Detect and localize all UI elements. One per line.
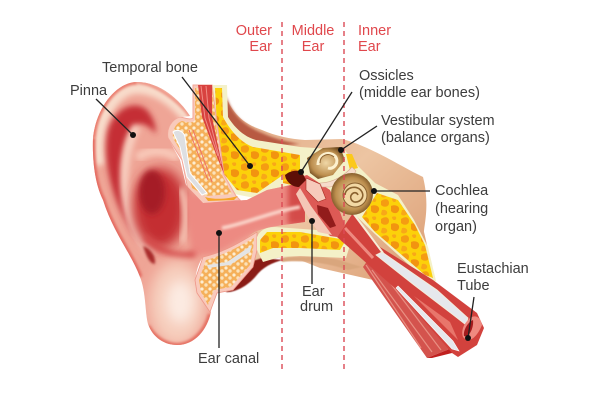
- muscle below the eustachian tube: [363, 257, 456, 358]
- outer ear (pinna, concha, lobe): [85, 75, 310, 350]
- temporal bone: [212, 85, 436, 284]
- callout: eustachian tube: [457, 261, 529, 341]
- canal: [184, 182, 305, 256]
- callout: vestibular system: [338, 113, 495, 153]
- vestibular system: [307, 147, 345, 179]
- eustachian tube: [337, 213, 484, 357]
- callout: pinna: Pinna: [70, 83, 108, 99]
- antihelix ridge: [125, 126, 152, 254]
- callout: cochlea: organ): [435, 219, 477, 235]
- ossicle bridge: [320, 167, 356, 187]
- callout: ear canal: Ear canal: [198, 351, 259, 367]
- callout: pinna: [70, 83, 136, 138]
- intertragic notch: [143, 246, 155, 264]
- tragus highlight: [181, 188, 185, 243]
- callout: ear drum: Ear: [302, 284, 325, 300]
- scapha dark groove: [106, 105, 156, 242]
- heading: middle ear: Ear: [302, 39, 324, 55]
- callout: ossicles: Ossicles: [359, 68, 414, 84]
- callout: cochlea: [371, 183, 489, 235]
- lobe: [149, 261, 205, 345]
- brown tissue behind the skull bone: [222, 92, 434, 292]
- heading: inner ear: Inner: [358, 23, 391, 39]
- cochlea: [331, 173, 373, 215]
- callout: ear drum: [300, 218, 333, 315]
- concha: [133, 168, 187, 248]
- callout: ossicles: (middle ear bones): [359, 85, 480, 101]
- callout: vestibular system: Vestibular system: [381, 113, 495, 129]
- callout: cochlea: (hearing: [435, 201, 488, 217]
- callout: ear canal: [198, 230, 259, 367]
- callout: eustachian tube: Eustachian: [457, 261, 529, 277]
- heading: outer ear: Outer: [236, 23, 272, 39]
- callout: cochlea: Cochlea: [435, 183, 489, 199]
- infographic: anatomy of the ear: [71, 22, 528, 369]
- dashed line: middle / inner boundary: [343, 22, 345, 370]
- callout: vestibular system: (balance organs): [381, 130, 490, 146]
- ear canal wall: cartilage and bone below: [195, 227, 351, 312]
- callout: ear drum: drum: [300, 299, 333, 315]
- dashed line: outer / middle boundary: [281, 22, 283, 370]
- helix rim: [98, 88, 188, 165]
- cartilage and muscle above the canal: [168, 85, 240, 204]
- heading: outer ear: Ear: [249, 39, 272, 55]
- callout: temporal bone: [102, 60, 253, 169]
- middle ear chamber and ear drum: [285, 171, 345, 237]
- heading: middle ear: Middle: [292, 23, 334, 39]
- callout: ossicles: [298, 68, 480, 175]
- callout: eustachian tube: Tube: [457, 278, 490, 294]
- heading: inner ear: Ear: [358, 39, 381, 55]
- callout: temporal bone: Temporal bone: [102, 60, 198, 76]
